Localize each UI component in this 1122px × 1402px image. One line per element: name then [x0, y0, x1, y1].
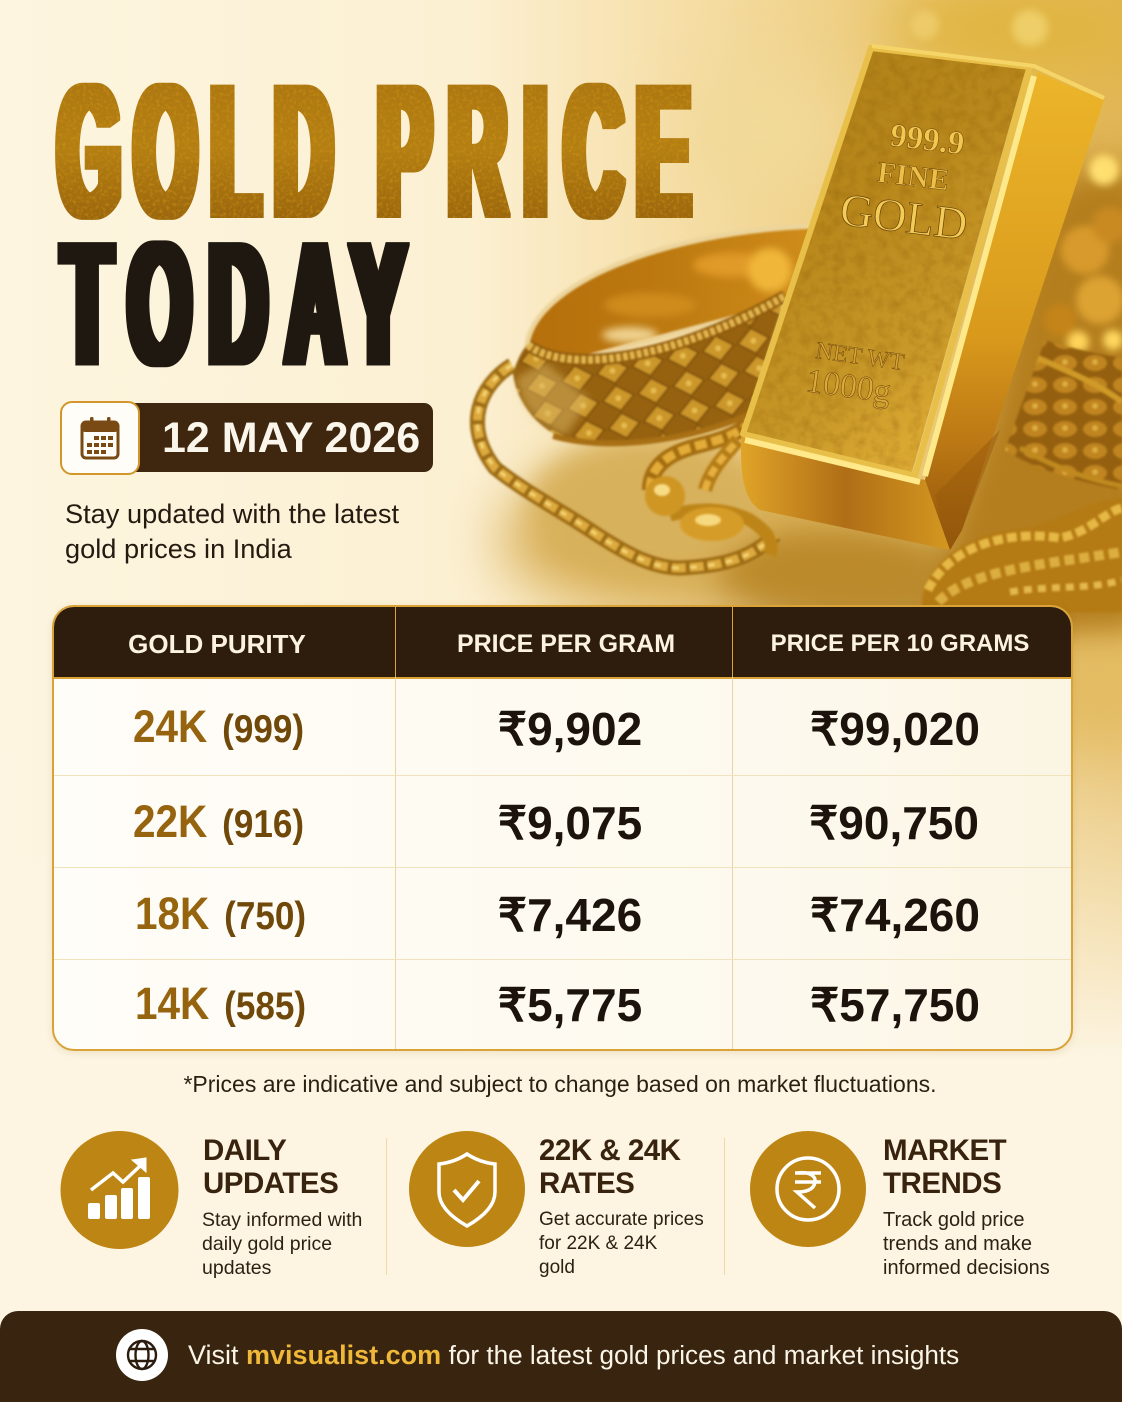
- row: 24K: ₹9,902: [498, 703, 642, 755]
- subtitle: [65, 498, 399, 564]
- subtitle: Stay updated with the latest: [65, 498, 399, 529]
- description: Get accurate prices: [539, 1209, 704, 1230]
- icon: rupee circle: [750, 1131, 866, 1247]
- row: 22K: ₹90,750: [809, 797, 979, 849]
- description: [539, 1209, 704, 1278]
- icon: rising bar chart: [60, 1131, 178, 1249]
- date badge: [60, 401, 433, 475]
- row: 22K: ₹9,075: [498, 797, 642, 849]
- feature: market trends: [750, 1131, 1050, 1279]
- heading: market trends: [883, 1134, 1006, 1200]
- description: gold: [539, 1257, 575, 1278]
- description: for 22K & 24K: [539, 1233, 657, 1254]
- footnote: *Prices are indicative and subject to change based on market fluctuations.: [183, 1071, 937, 1097]
- gold bar: FINE: [876, 156, 951, 197]
- heading: daily updates: [203, 1134, 338, 1200]
- row: 18K: ₹74,260: [810, 889, 980, 941]
- description: trends and make: [883, 1233, 1032, 1255]
- row: 14K: [135, 978, 980, 1031]
- row: 14K: 14K (585): [135, 978, 306, 1029]
- row: 14K: ₹57,750: [810, 979, 980, 1031]
- gold bar: [741, 46, 1104, 550]
- heading: 22K & 24K rates: [539, 1134, 681, 1200]
- heading: daily updates: UPDATES: [203, 1167, 338, 1200]
- heading: market trends: TRENDS: [883, 1167, 1001, 1200]
- heading: market trends: MARKET: [883, 1134, 1006, 1167]
- footer text: Visit mvisualist.com for the latest gold prices and market insights: [188, 1340, 959, 1370]
- row: 22K: [133, 796, 979, 849]
- heading: 22K & 24K rates: 22K & 24K: [539, 1134, 680, 1167]
- row: 22K: 22K (916): [133, 796, 304, 847]
- row: 24K: [133, 701, 980, 755]
- gold bar: GOLD: [837, 184, 970, 250]
- date text: 12 MAY 2026: [162, 414, 420, 462]
- icon: globe: [116, 1329, 168, 1381]
- gold chain: [477, 365, 775, 568]
- gold bar: NET WT: [814, 338, 906, 376]
- title: gold price today: [55, 60, 693, 390]
- footer bar: [0, 1311, 1122, 1402]
- description: Stay informed with: [202, 1209, 362, 1231]
- right jewellery: bands and chains: [922, 340, 1122, 612]
- description: informed decisions: [883, 1257, 1050, 1279]
- feature: 22K and 24K rates: [409, 1131, 704, 1278]
- row: 24K: ₹99,020: [810, 703, 980, 755]
- description: updates: [202, 1257, 271, 1279]
- row: 18K: 18K (750): [135, 888, 306, 939]
- subtitle: gold prices in India: [65, 533, 292, 564]
- heading: 22K & 24K rates: RATES: [539, 1167, 634, 1200]
- bangle: [513, 226, 815, 443]
- description: [202, 1209, 362, 1279]
- icon: shield check: [409, 1131, 525, 1247]
- gold bar: 1000g: [804, 362, 893, 411]
- row: 18K: ₹7,426: [498, 889, 642, 941]
- feature: daily updates: [60, 1131, 362, 1279]
- row: 18K: [135, 888, 980, 941]
- column header: gold purity: GOLD PURITY: [128, 629, 306, 659]
- icon: calendar: [80, 417, 120, 460]
- description: [883, 1209, 1050, 1279]
- column header: price per gram: PRICE PER GRAM: [457, 630, 675, 658]
- row: 24K: 24K (999): [133, 701, 304, 752]
- row: 14K: ₹5,775: [498, 979, 642, 1031]
- price table: [52, 605, 1073, 1051]
- heading: daily updates: DAILY: [203, 1134, 286, 1167]
- column header: price per 10 grams: PRICE PER 10 GRAMS: [771, 630, 1029, 657]
- gold bar: 999.9: [888, 118, 966, 162]
- description: daily gold price: [202, 1233, 332, 1255]
- description: Track gold price: [883, 1209, 1025, 1231]
